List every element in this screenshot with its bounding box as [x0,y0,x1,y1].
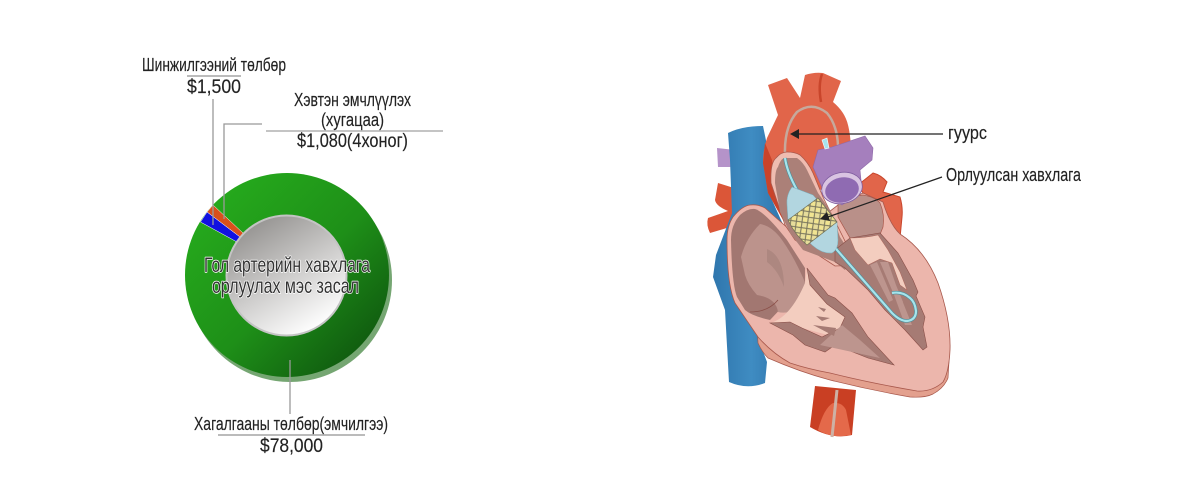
label: hospital stay: (хугацаа) [321,109,384,130]
label: implanted valve: Орлуулсан хавхлага [946,164,1082,185]
aortic root wall [771,152,862,266]
donut shadow [188,178,392,382]
center title [204,254,370,298]
leader: surgery fee [289,360,291,414]
slice: examination fee [200,212,240,242]
heart wall main [727,193,950,391]
donut chart [185,173,392,382]
catheter highlight [785,158,916,321]
purple vessel left [717,148,735,167]
label: hospital stay: $1,080(4хоног) [297,131,408,152]
catheter tip [822,138,829,149]
superior vena cava [713,126,790,386]
label: examination fee: $1,500 [187,77,241,98]
pulmonary artery [813,136,873,207]
tricuspid valve and right ventricle [770,268,894,365]
label: surgery fee: Хагалгааны төлбөр(эмчилгээ) [194,413,388,434]
valve stent [788,198,837,245]
label: surgery fee [194,413,388,457]
heart illustration [707,73,950,437]
donut ring: surgery fee [185,173,389,377]
arrow: catheter label [790,129,943,139]
leader: hospital stay [224,124,262,219]
slice: hospital stay [207,205,243,237]
label: catheter: гуурс [948,122,987,143]
arrow: valve label [820,177,942,221]
label: hospital stay [266,89,443,152]
label: surgery fee: $78,000 [260,436,323,457]
balloon [787,187,838,253]
label: examination fee: Шинжилгээний төлбөр [142,54,286,75]
aortic root cavity [775,158,853,270]
label: hospital stay: Хэвтэн эмчлүүлэх [294,89,412,110]
descending aorta [810,386,856,437]
leader: examination fee [212,99,214,225]
donut hole [226,216,346,336]
aorta [763,73,852,227]
red pulmonary vessels left [707,183,737,233]
center title: орлуулах мэс засал [212,275,359,298]
catheter [785,158,916,321]
heart wall lower layer [757,300,950,397]
left ventricle cavity [835,233,927,350]
left atrium cavity [838,195,884,242]
catheter wire in aorta [785,107,838,155]
center title: Гол артерийн хавхлага [204,254,370,277]
label: examination fee [142,54,286,98]
right atrium cavity [731,209,807,320]
red pulmonary vessels right [858,173,902,238]
